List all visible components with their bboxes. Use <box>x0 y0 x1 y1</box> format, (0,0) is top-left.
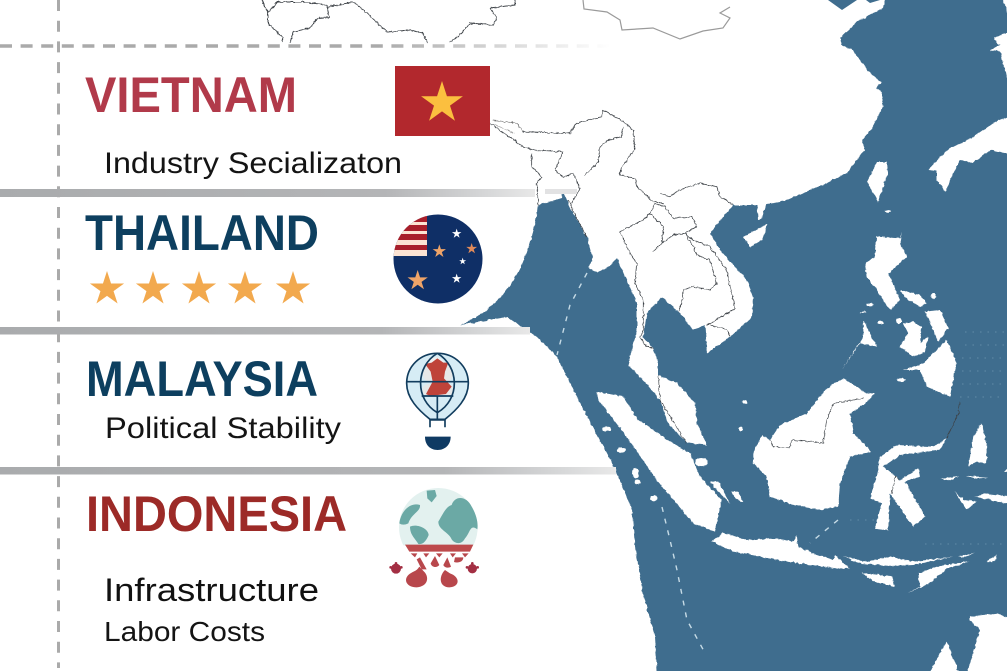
map: mainland country borders <box>490 110 735 348</box>
map: faint dotted texture <box>850 332 1007 544</box>
heading: Indonesia: INDONESIA <box>86 486 347 542</box>
heading: Malaysia: MALAYSIA <box>86 351 318 407</box>
icon: round flag with stars <box>390 210 482 304</box>
icon: Vietnam flag <box>395 66 490 136</box>
map: grey northern outline <box>583 0 730 39</box>
heading: Thailand: THAILAND <box>85 205 319 261</box>
text: Political Stability label: Political Stability <box>105 412 341 445</box>
panel: Thailand <box>85 205 482 304</box>
map: Philippines <box>842 210 957 397</box>
icon: globe with red base <box>389 488 479 587</box>
map: Malay peninsula border <box>658 375 960 493</box>
rating: five stars <box>90 271 310 304</box>
icon: hot air balloon globe <box>407 353 468 450</box>
map: northern borders <box>260 0 515 43</box>
panel: Malaysia <box>86 351 468 450</box>
section divider bars <box>0 189 616 474</box>
map of Southeast Asia <box>260 0 1007 671</box>
map: sea <box>460 0 1007 671</box>
panel: Indonesia <box>86 486 479 647</box>
heading: Vietnam: VIETNAM <box>85 67 297 123</box>
panel: Vietnam <box>85 66 490 180</box>
map: Indonesia and Borneo <box>597 378 1007 671</box>
dashed frame lines <box>0 0 610 668</box>
text: Infrastructure label: Infrastructure <box>104 572 319 608</box>
map: sea patches in the north <box>828 0 880 10</box>
map: northern land and islands in East Asia <box>743 0 1007 247</box>
text: Industry Specialization label: Industry Secializaton <box>104 147 402 180</box>
map: dashed shipping routes <box>557 273 838 653</box>
text: Labor Costs label: Labor Costs <box>104 616 265 647</box>
